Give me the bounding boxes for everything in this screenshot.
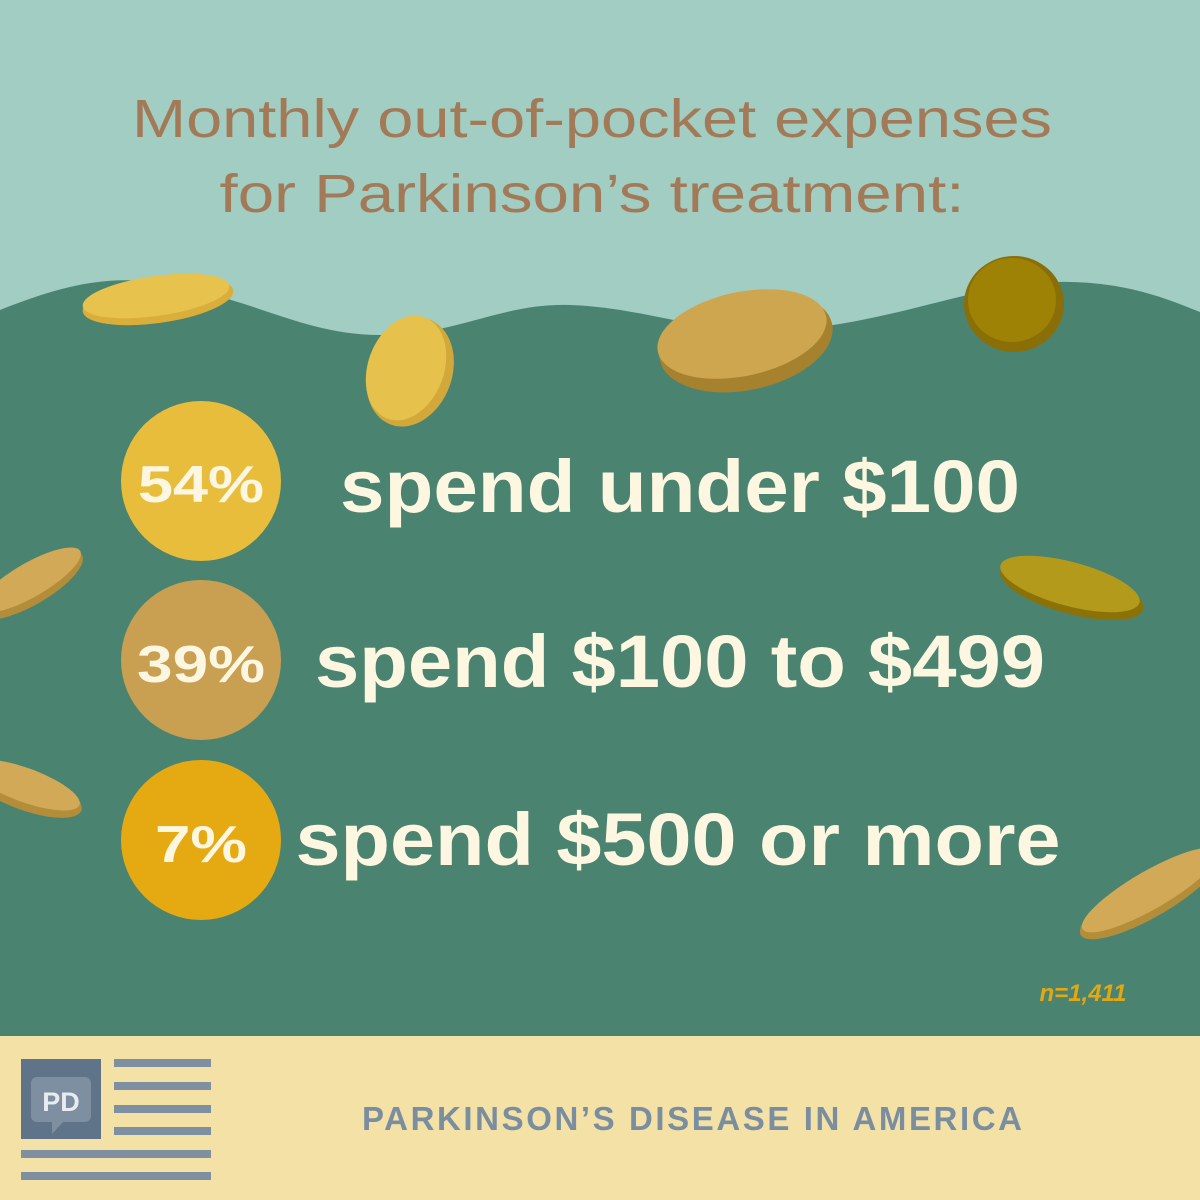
logo: PD	[42, 1087, 80, 1117]
stat row 1: 54%	[138, 456, 264, 514]
title: for Parkinson’s treatment:	[220, 164, 964, 224]
stat row 1: spend under $100	[340, 445, 1020, 528]
stat row 2: 39%	[137, 636, 265, 694]
title: Monthly out-of-pocket expenses	[132, 89, 1052, 149]
logo	[21, 1059, 211, 1180]
sample size note: n=1,411	[1040, 980, 1126, 1007]
footer band	[0, 1036, 1200, 1200]
stat row 2: spend $100 to $499	[315, 620, 1045, 703]
stat row 1	[121, 401, 1020, 561]
stat row 3: spend $500 or more	[296, 798, 1060, 881]
footer title: PARKINSON’S DISEASE IN AMERICA	[362, 1100, 1022, 1137]
title	[132, 89, 1052, 224]
stat row 2	[121, 580, 1045, 740]
green hills background	[0, 280, 1200, 1040]
falling coins	[0, 256, 1200, 954]
stat row 3	[121, 760, 1060, 920]
stat row 3: 7%	[155, 816, 247, 874]
